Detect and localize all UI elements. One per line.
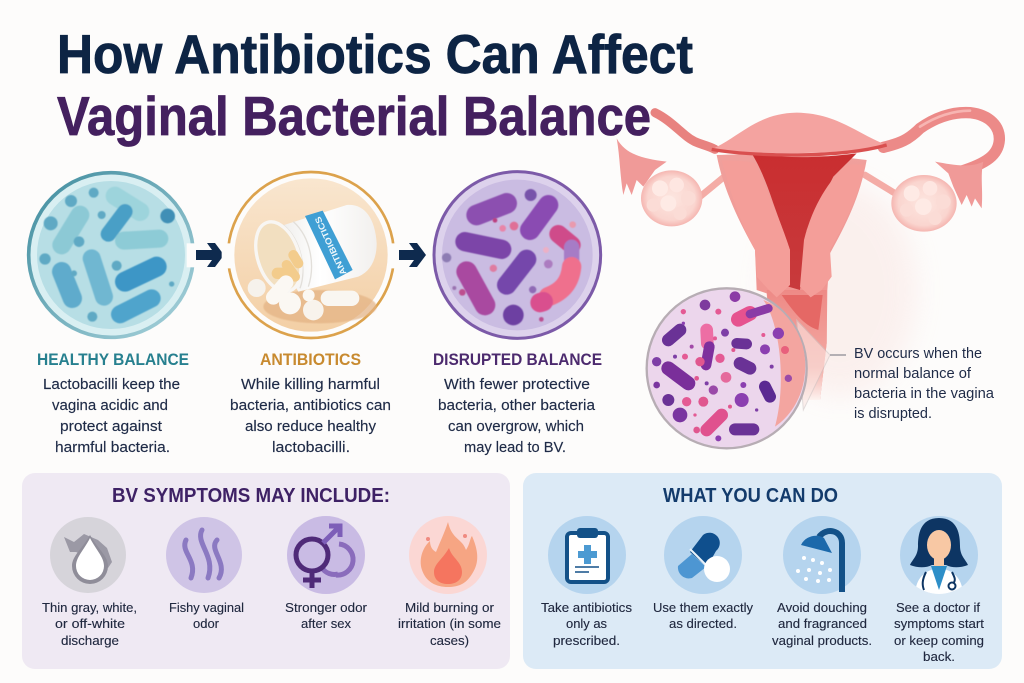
icon: shower [783,516,861,594]
vaginal inner wall [782,295,823,330]
right ovary [891,175,957,232]
title line 1: How Antibiotics Can Affect [57,23,693,85]
icon: doctor [900,516,978,596]
symptom text: discharge [42,600,137,648]
right fallopian tube [883,113,999,172]
symptom text: burning: Mild burning or [405,600,495,615]
ring [228,172,394,338]
spilled pills [248,279,352,320]
symptom text: stronger odor [285,600,368,631]
symptom text: discharge: or off-white [55,616,125,631]
disrupted balance text: bacteria, other bacteria [438,398,596,414]
right tube highlight [920,111,970,127]
panel: antibiotics circle [222,172,400,338]
symptom text: discharge: Thin gray, white, [42,600,137,615]
symptom text: stronger odor: after sex [301,616,352,631]
disrupted balance text: may lead to BV. [464,440,566,456]
cavity top edge [712,145,887,155]
disrupted balance text [438,377,596,456]
disrupted balance text: can overgrow, which [448,419,584,435]
action text: see a doctor: symptoms start [894,616,984,631]
vagina canal [767,290,827,400]
action text: douching: Avoid douching [777,600,867,615]
healthy balance text: Lactobacilli keep the [43,377,180,393]
panel background [523,473,1002,669]
action text: see a doctor [894,600,984,664]
left ovarian ligament [700,173,728,197]
symptom text: stronger odor: Stronger odor [285,600,368,615]
panel background [22,473,510,669]
symptom text: odor: odor [193,616,220,631]
magnifier lens [647,288,807,448]
callout: BV definition [854,346,995,422]
action text: douching: and fragranced [778,616,867,631]
action text: directed [653,600,754,631]
panel: BV symptoms [22,473,510,669]
dish inner [442,180,593,330]
symptom text: discharge: discharge [61,633,119,648]
action text: douching [772,600,872,648]
bottle shadow [263,290,377,323]
icon: odor waves [166,517,242,593]
lens bacteria [668,308,770,430]
left ovary [641,170,702,226]
disrupted balance text: With fewer protective [444,377,590,393]
pills inside bottle [277,255,298,277]
tissue edge inside lens [763,300,805,427]
antibiotics text: also reduce healthy [245,419,377,435]
arrow 2 [399,243,426,267]
title line 2: Vaginal Bacterial Balance [57,85,651,147]
antibiotics heading: ANTIBIOTICS [260,350,361,369]
illustration: uterus anatomy with magnified bacteria [617,111,999,448]
callout: BV definition: BV occurs when the [854,346,982,362]
action text: prescribed: only as [566,616,607,631]
action text: prescribed: prescribed. [553,633,620,648]
ring gaps [222,243,400,268]
panel heading: WHAT YOU CAN DO [663,484,838,507]
symptom text: odor: Fishy vaginal [169,600,244,615]
panel: healthy balance circle [29,173,200,337]
dish [29,173,193,337]
icon: clipboard [548,516,626,594]
title [57,23,693,147]
left muscular wall [722,161,790,297]
soft shadow behind anatomy [763,183,917,397]
callout: BV definition: normal balance of [854,366,972,382]
callout: BV definition: bacteria in the vagina [854,386,995,402]
bottle body [263,205,377,292]
action text: see a doctor: back. [923,649,955,664]
antibiotics text: lactobacilli. [272,440,350,456]
healthy balance text: harmful bacteria. [55,440,170,456]
panel: disrupted balance circle [434,172,601,338]
action text: prescribed: Take antibiotics [541,600,632,615]
lactobacilli rods [62,196,159,314]
antibiotics text: bacteria, antibiotics can [230,398,391,414]
healthy balance heading: HEALTHY BALANCE [37,350,189,369]
lens cocci [652,291,792,441]
cocci [442,189,576,325]
small cocci [39,188,175,322]
icon: flame [409,516,487,594]
step labels [37,350,602,456]
right ovarian ligament [865,175,895,193]
symptom text: burning: cases) [430,633,469,648]
bottle opening [248,216,309,297]
action text: see a doctor: or keep coming [894,633,984,648]
healthy balance text: protect against [60,419,162,435]
lens disc [647,288,807,448]
callout: BV definition: is disrupted. [854,406,932,422]
icon: gender symbols [287,516,365,594]
gap for arrow [187,243,200,267]
action text: douching: vaginal products. [772,633,872,648]
antibiotics text [230,377,391,456]
healthy balance text: vagina acidic and [52,398,168,414]
bacteria rods [465,203,572,305]
icon: pill and tablet [664,516,742,594]
action text: see a doctor: See a doctor if [896,600,980,615]
antibiotics text: While killing harmful [241,377,380,393]
icon: discharge drop [50,517,126,593]
right fimbriae [935,162,983,208]
symptom text: burning: irritation (in some [398,616,501,631]
action text: directed: Use them exactly [653,600,754,615]
dish [434,172,601,338]
panel: what you can do [523,473,1002,669]
left fallopian tube [655,113,715,149]
symptom text: odor [169,600,244,631]
symptom text: burning [398,600,501,648]
left fimbriae [617,138,667,195]
right muscular wall [800,164,865,297]
dish inner [37,181,185,329]
bottle ribs [283,222,311,288]
disrupted balance heading: DISRUPTED BALANCE [433,350,602,369]
panel heading: BV SYMPTOMS MAY INCLUDE: [112,484,390,507]
uterine cavity [752,153,857,290]
action text: directed: as directed. [669,616,737,631]
arrow 1 [196,243,224,267]
magnifier connector [797,320,830,410]
label band [305,211,353,279]
uterus fundus [712,113,887,153]
healthy balance text [43,377,180,456]
callout leader line [830,353,846,356]
action text: prescribed [541,600,632,648]
disc [234,178,388,332]
bottle text: ANTIBIOTICS [313,215,348,277]
uterine body [717,154,867,400]
